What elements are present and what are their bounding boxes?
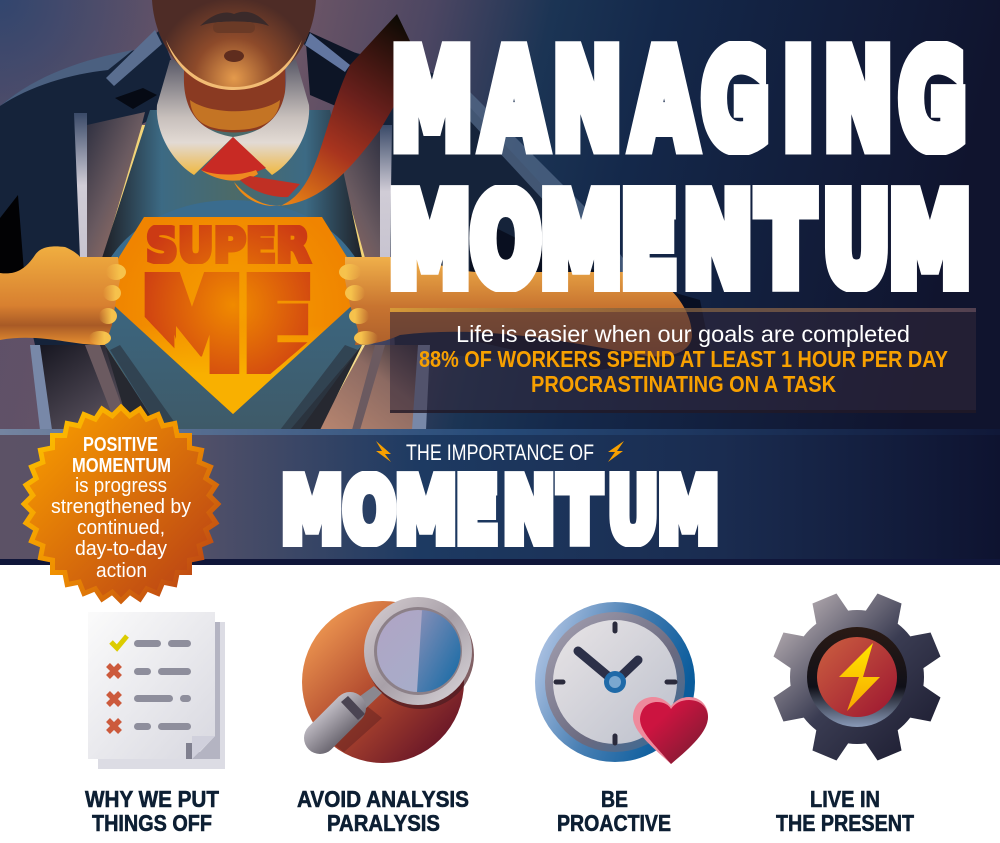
icon: checklist document — [88, 612, 225, 769]
band heading: MOMENTUM — [281, 460, 719, 562]
badge text: action — [96, 560, 147, 582]
ME: ME — [141, 252, 313, 397]
teal shirt lower — [102, 258, 362, 430]
icon: clock with heart — [535, 602, 708, 764]
icon: magnifying glass — [302, 597, 474, 763]
right arm and fist — [339, 257, 692, 356]
moustache — [200, 12, 269, 26]
header background — [0, 0, 1000, 430]
right sleeve of jacket — [300, 40, 720, 372]
necktie — [201, 14, 420, 206]
label: be proactive — [557, 786, 671, 836]
badge text: day-to-day — [75, 538, 167, 560]
shirt collar — [157, 60, 309, 175]
badge text — [51, 434, 191, 582]
shirt lining right — [315, 120, 392, 258]
label: avoid analysis paralysis — [297, 786, 469, 836]
head — [152, 0, 316, 90]
label: live in the present: THE PRESENT — [776, 810, 914, 836]
label: avoid analysis paralysis: AVOID ANALYSIS — [297, 786, 469, 812]
label: why we put things off: WHY WE PUT — [85, 786, 219, 812]
MOMENTUM: MOMENTUM — [389, 169, 971, 313]
icon: left lightning bolt — [376, 441, 391, 462]
label: be proactive: PROACTIVE — [557, 810, 671, 836]
heart — [633, 697, 708, 764]
chin mark — [224, 50, 244, 62]
label: live in the present: LIVE IN — [810, 786, 880, 812]
chest shield — [108, 217, 358, 414]
teal shirt upper — [102, 110, 362, 258]
neck — [184, 60, 285, 132]
icon: gear with lightning bolt — [770, 590, 945, 765]
icon: right lightning bolt — [608, 441, 624, 462]
hero: businessman opening shirt — [0, 0, 720, 430]
badge text: MOMENTUM — [72, 455, 171, 477]
panel statistic: PROCRASTINATING ON A TASK — [531, 371, 836, 397]
starburst badge — [20, 404, 222, 604]
MANAGING: MANAGING — [391, 23, 966, 177]
left jacket — [0, 30, 175, 345]
right collar lapel — [305, 30, 360, 110]
lower lining left — [30, 345, 155, 430]
badge text: POSITIVE — [83, 434, 158, 456]
shirt lining left — [74, 112, 148, 258]
lower lining right — [308, 345, 430, 430]
panel intro line: Life is easier when our goals are completed — [456, 321, 910, 347]
label: why we put things off — [85, 786, 219, 836]
label: avoid analysis paralysis: PARALYSIS — [327, 810, 440, 836]
label: why we put things off: THINGS OFF — [92, 810, 212, 836]
main title — [390, 41, 969, 292]
badge text: continued, — [77, 517, 165, 539]
left fist — [0, 246, 126, 345]
label: live in the present — [776, 786, 914, 836]
band subtitle: THE IMPORTANCE OF — [406, 440, 594, 465]
stat panel — [390, 308, 976, 413]
badge text: strengthened by — [51, 496, 191, 518]
badge text: is progress — [75, 475, 167, 497]
SUPER: SUPER — [146, 218, 310, 274]
panel statistic — [419, 346, 948, 397]
label: be proactive: BE — [601, 786, 628, 812]
momentum band — [0, 429, 1000, 565]
